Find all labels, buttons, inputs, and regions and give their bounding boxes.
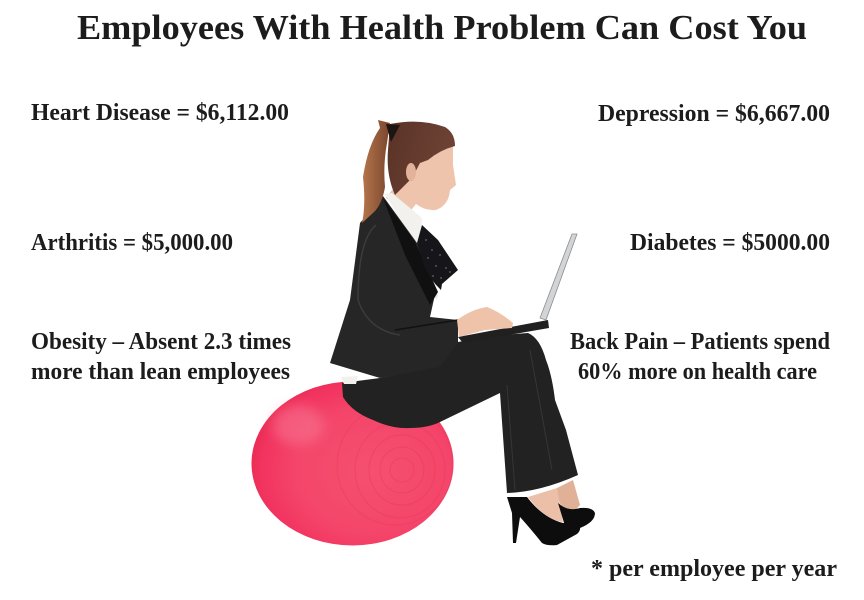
text: back pain note — [570, 329, 831, 385]
text: obesity note: more than lean employees — [31, 359, 290, 385]
text: back pain note: Back Pain – Patients spend — [570, 329, 831, 355]
laptop — [458, 234, 577, 343]
white shirt hem — [341, 376, 358, 384]
text: arthritis cost: Arthritis = $5,000.00 — [31, 230, 233, 256]
title: Employees With Health Problem Can Cost You — [77, 8, 807, 47]
jacket — [330, 196, 458, 378]
neck and face — [386, 127, 456, 214]
text: back pain note: 60% more on health care — [578, 359, 817, 385]
trousers — [342, 333, 578, 493]
exercise ball — [252, 382, 454, 546]
shoes and feet — [507, 480, 595, 545]
hair and ponytail — [362, 120, 455, 223]
text: obesity note — [31, 329, 291, 385]
text: heart disease cost: Heart Disease = $6,112.00 — [31, 100, 289, 126]
text: footnote: * per employee per year — [591, 556, 837, 582]
text: depression cost: Depression = $6,667.00 — [598, 101, 830, 127]
illustration: woman on exercise ball — [252, 120, 595, 546]
text: diabetes cost: Diabetes = $5000.00 — [630, 230, 830, 256]
text: obesity note: Obesity – Absent 2.3 times — [31, 329, 291, 355]
polka dot scarf — [417, 225, 458, 290]
shirt collar — [385, 193, 422, 245]
hand — [457, 307, 513, 337]
